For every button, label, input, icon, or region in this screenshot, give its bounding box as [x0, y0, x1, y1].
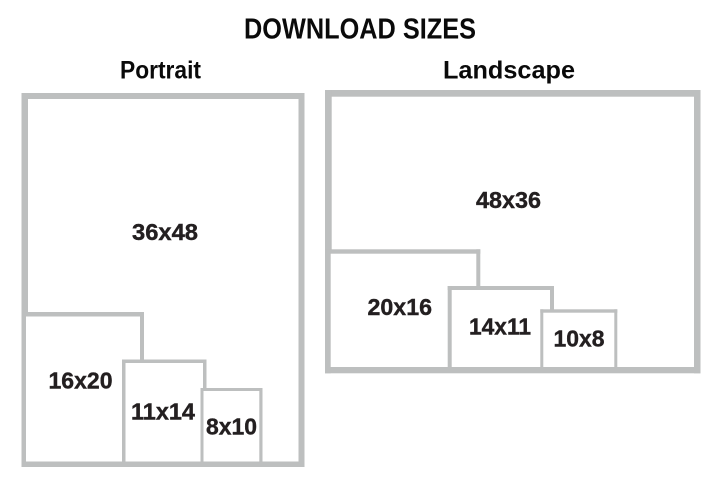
label: 16x20: 16x20 — [48, 368, 112, 394]
panel: portrait sizes — [22, 93, 304, 467]
frame: 8x10 — [200, 388, 262, 463]
label: 14x11: 14x11 — [469, 314, 531, 340]
frame: 14x11 — [448, 286, 554, 368]
label: 48x36: 48x36 — [476, 187, 541, 213]
title: DOWNLOAD SIZES — [244, 14, 476, 46]
frame: 48x36 — [325, 90, 700, 373]
heading: landscape: Landscape — [443, 56, 575, 84]
label: 20x16: 20x16 — [368, 294, 432, 320]
label: 10x8: 10x8 — [554, 326, 605, 352]
frame: 10x8 — [540, 309, 617, 368]
frame: 20x16 — [330, 249, 480, 287]
heading: portrait: Portrait — [120, 56, 202, 84]
label: 11x14: 11x14 — [131, 398, 195, 424]
label: 36x48: 36x48 — [132, 219, 198, 245]
frame: 11x14 — [122, 360, 206, 462]
panel: landscape sizes — [325, 90, 700, 373]
label: 8x10: 8x10 — [206, 413, 257, 439]
frame: 36x48 — [22, 93, 304, 467]
frame: 16x20 — [25, 312, 144, 361]
